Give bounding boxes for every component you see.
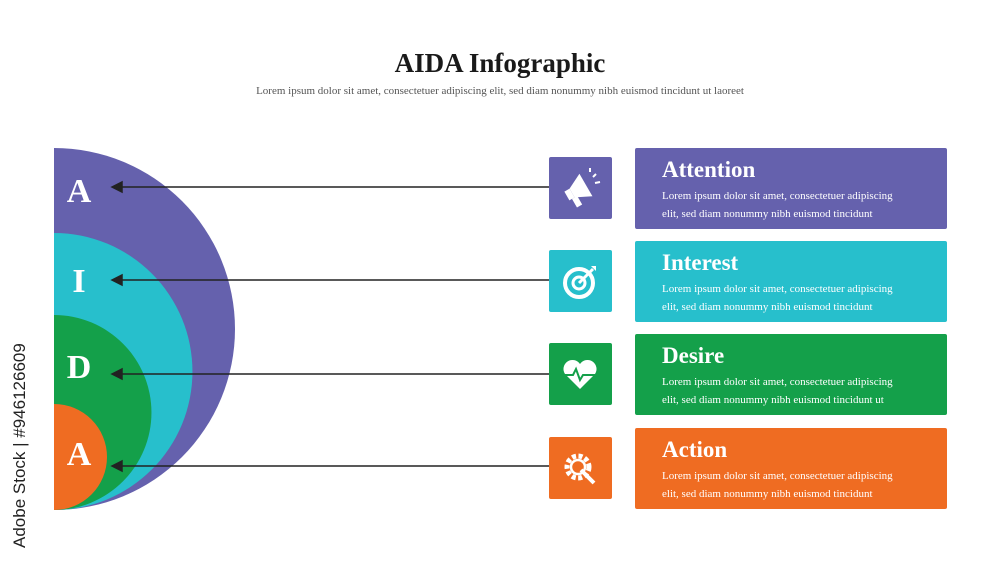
watermark text: Adobe Stock | #946126609 <box>10 343 29 548</box>
semicircle diagram: D <box>67 349 91 386</box>
panel: attention: Attention <box>662 157 755 182</box>
icon: target <box>549 250 612 312</box>
panel: desire: Lorem ipsum dolor sit amet, consectetuer adipiscing <box>662 376 893 388</box>
panel: desire: Desire <box>662 343 724 368</box>
subtitle: Lorem ipsum dolor sit amet, consectetuer adipiscing elit, sed diam nonummy nibh euismod tincidunt ut laoreet <box>256 85 744 97</box>
panel: interest: elit, sed diam nonummy nibh euismod tincidunt <box>662 300 873 312</box>
title: AIDA Infographic <box>395 48 605 78</box>
semicircle diagram: A <box>67 173 92 210</box>
panel: attention: Lorem ipsum dolor sit amet, consectetuer adipiscing <box>662 190 893 202</box>
panel: interest: Interest <box>662 250 738 275</box>
panel: attention: elit, sed diam nonummy nibh euismod tincidunt <box>662 208 873 220</box>
semicircle diagram: I <box>72 263 86 300</box>
panel: action: Lorem ipsum dolor sit amet, consectetuer adipiscing <box>662 470 893 482</box>
panel: action: Action <box>662 437 727 462</box>
icon: heart <box>549 343 612 405</box>
semicircle diagram: A <box>67 436 92 473</box>
icon: megaphone <box>549 157 612 219</box>
panel: interest <box>635 241 947 322</box>
panel: attention <box>635 148 947 229</box>
panel: interest: Lorem ipsum dolor sit amet, consectetuer adipiscing <box>662 283 893 295</box>
panel: action: elit, sed diam nonummy nibh euismod tincidunt <box>662 488 873 500</box>
panel: desire: elit, sed diam nonummy nibh euismod tincidunt ut <box>662 394 884 406</box>
panel: desire <box>635 334 947 415</box>
icon: gear <box>549 437 612 499</box>
panel: action <box>635 428 947 509</box>
